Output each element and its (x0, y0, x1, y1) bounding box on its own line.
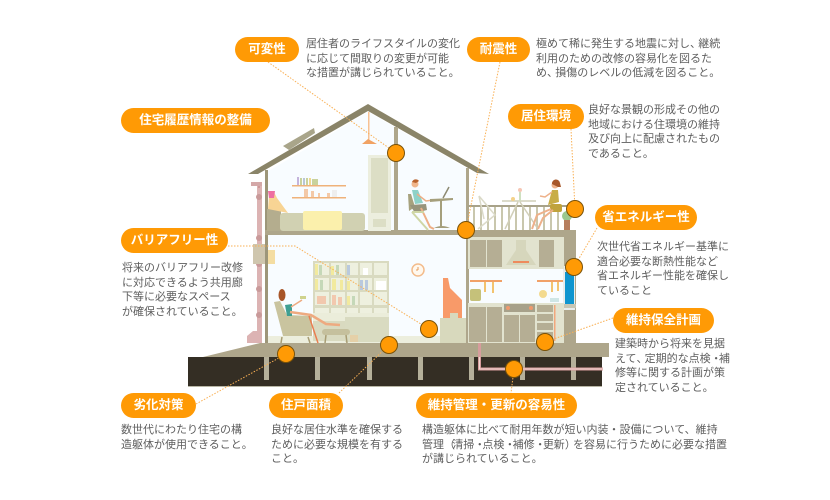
foundation and ground (188, 343, 609, 387)
label: 可変性 (235, 37, 299, 62)
wall shelves (292, 177, 346, 198)
kitchen cabinets and appliances (468, 237, 564, 343)
closet (368, 155, 391, 231)
text: 維持管理・更新の容易性 description: 管理（清掃・点検・補修・更新）を容易に行うために必要な措置 (422, 439, 727, 451)
dotted leader lines (196, 62, 613, 404)
label: 住戸面積: 住戸面積 (281, 398, 331, 412)
text: 維持保全計画 description: 修等に関する計画が策 (615, 367, 725, 379)
label: 維持管理・更新の容易性 (416, 393, 577, 418)
blue window (563, 266, 576, 310)
text: 住戸面積 description: こと。 (271, 453, 304, 465)
wall clock (412, 264, 424, 276)
marker dots (278, 144, 584, 378)
label: 住宅履歴情報の整備: 住宅履歴情報の整備 (139, 113, 252, 127)
text: 耐震性 description: 極めて稀に発生する地震に対し、継続 (536, 38, 720, 50)
label: 住宅履歴情報の整備 (121, 108, 270, 133)
label: 劣化対策 (121, 393, 196, 418)
text: 維持保全計画 description (615, 338, 730, 394)
solar panel on roof (283, 128, 315, 150)
text: 維持保全計画 description: えて、定期的な点検・補 (615, 353, 730, 365)
text: 耐震性 description: 利用のための改修の容易化を図るた (536, 53, 712, 65)
text: 住戸面積 description: ために必要な規模を有する (271, 439, 403, 451)
person at desk (408, 179, 453, 230)
balcony with railing, table and woman (468, 179, 573, 230)
bed and lamp (267, 191, 365, 231)
text: 省エネルギー性 description (597, 240, 729, 297)
text: 維持保全計画 description: 定されていること。 (615, 382, 714, 394)
text: 維持管理・更新の容易性 description: が講じられていること。 (422, 453, 543, 465)
text: バリアフリー性 description: 下等に必要なスペース (122, 291, 231, 303)
upper floor interior (267, 112, 466, 231)
lower floor interior (267, 235, 467, 343)
label: バリアフリー性: バリアフリー性 (131, 233, 218, 247)
text: 省エネルギー性 description: ていること (597, 285, 652, 297)
kitchen interior (469, 235, 564, 343)
text: 住戸面積 description: 良好な居住水準を確保する (271, 424, 403, 436)
orange fireplace panel and cabinet (440, 278, 466, 343)
text: 可変性 description (306, 38, 460, 79)
label: 住戸面積 (269, 393, 343, 418)
label: 居住環境: 居住環境 (521, 109, 571, 123)
text: 維持管理・更新の容易性 description (422, 424, 727, 465)
text: バリアフリー性 description: 将来のバリアフリー改修 (122, 262, 243, 274)
label: 劣化対策: 劣化対策 (133, 398, 184, 412)
text: 劣化対策 description: 数世代にわたり住宅の構 (121, 424, 242, 436)
text: 耐震性 description (536, 38, 720, 79)
man in armchair (274, 289, 358, 343)
text: 居住環境 description: 地域における住環境の維持 (588, 119, 720, 131)
label: バリアフリー性 (121, 228, 228, 253)
text: バリアフリー性 description: が確保されていること。 (122, 306, 243, 318)
text: バリアフリー性 description: に対応できるよう共用廊 (122, 277, 243, 289)
text: 省エネルギー性 description: 適合必要な断熱性能など (597, 256, 718, 268)
label: 居住環境 (508, 104, 584, 129)
text: 居住環境 description: 及び向上に配慮されたもの (588, 133, 720, 145)
bookshelf (313, 261, 389, 342)
label: 維持保全計画: 維持保全計画 (626, 313, 701, 327)
label: 可変性: 可変性 (248, 42, 286, 56)
text: 住戸面積 description (271, 424, 403, 465)
text: 省エネルギー性 description: 次世代省エネルギー基準に (597, 241, 729, 253)
pendant lamp (362, 112, 377, 144)
text: 省エネルギー性 description: 省エネルギー性能を確保し (597, 270, 729, 282)
label: 省エネルギー性 (595, 205, 697, 230)
label: 維持保全計画 (613, 308, 714, 333)
text: 居住環境 description (588, 104, 720, 160)
drain pipe (247, 182, 275, 343)
text: 耐震性 description: め、損傷のレベルの低減を図ること。 (536, 67, 720, 79)
text: 可変性 description: な措置が講じられていること。 (306, 67, 460, 79)
text: 可変性 description: 居住者のライフスタイルの変化 (306, 38, 460, 50)
text: 維持管理・更新の容易性 description: 構造躯体に比べて耐用年数が短い内装・設備について、維持 (422, 424, 718, 436)
label: 耐震性: 耐震性 (480, 42, 517, 56)
label: 維持管理・更新の容易性: 維持管理・更新の容易性 (428, 398, 565, 412)
text: 劣化対策 description: 造躯体が使用できること。 (121, 439, 253, 451)
text: 劣化対策 description (121, 424, 253, 451)
text: 居住環境 description: 良好な景観の形成その他の (588, 104, 720, 116)
text: バリアフリー性 description (122, 262, 243, 318)
text: 居住環境 description: であること。 (588, 148, 654, 160)
label: 耐震性 (467, 37, 530, 62)
label: 省エネルギー性: 省エネルギー性 (602, 210, 690, 224)
walls and floors (265, 127, 576, 343)
roof (248, 104, 489, 174)
text: 可変性 description: に応じて間取りの変更が可能 (306, 53, 449, 65)
text: 維持保全計画 description: 建築時から将来を見据 (615, 338, 725, 350)
